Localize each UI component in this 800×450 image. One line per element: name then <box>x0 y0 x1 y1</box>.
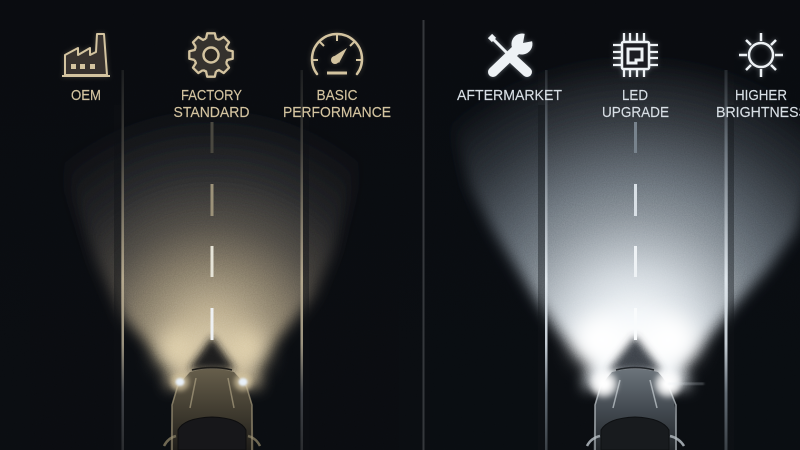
car body <box>170 369 254 450</box>
lane lines <box>122 20 728 450</box>
car body <box>593 369 677 450</box>
centre dashes: left road <box>210 122 214 340</box>
icon: chip <box>613 33 658 77</box>
mirrors <box>587 436 684 446</box>
label: factory standard: FACTORY <box>181 87 242 104</box>
dark notch ahead of car <box>188 336 236 370</box>
warm hotspots near car <box>158 330 266 370</box>
road shoulders dim <box>430 60 800 450</box>
icon: speedometer <box>312 34 362 74</box>
panel: aftermarket LED beam <box>430 60 800 450</box>
label: higher brightness: HIGHER <box>735 87 787 104</box>
car edges <box>595 380 676 450</box>
hood crease <box>616 368 654 370</box>
dark notch ahead of car <box>608 336 662 371</box>
warm light funnel <box>40 60 385 388</box>
label: OEM: OEM <box>71 87 101 104</box>
label: basic performance <box>283 87 391 121</box>
mirrors <box>164 436 260 446</box>
headlights glow <box>591 371 704 397</box>
label: factory standard <box>174 87 250 121</box>
panel: OEM halogen beam <box>30 60 399 450</box>
hood crease <box>192 368 232 370</box>
road shoulder shadows <box>538 105 734 450</box>
label: LED upgrade: LED <box>622 87 648 104</box>
white hotspots near car <box>574 316 696 364</box>
label: basic performance: BASIC <box>316 87 358 104</box>
icon: gear <box>189 33 233 77</box>
icon: sun <box>739 33 783 77</box>
headlights <box>171 373 252 391</box>
icon: wrench and screwdriver <box>490 34 532 72</box>
windshield <box>178 417 246 450</box>
lens flare <box>668 383 704 384</box>
label: higher brightness <box>716 87 800 121</box>
centre dashes: right road <box>634 122 637 340</box>
road shoulder shadows <box>114 105 309 450</box>
white light funnel <box>435 60 800 388</box>
car edges <box>172 378 252 450</box>
icon: factory <box>62 34 110 76</box>
label: basic performance: PERFORMANCE <box>283 104 391 121</box>
road shoulders dim <box>30 60 399 450</box>
label: LED upgrade <box>602 87 669 121</box>
car: halogen <box>164 368 260 450</box>
label: LED upgrade: UPGRADE <box>602 104 669 121</box>
car: LED <box>587 368 704 450</box>
windshield <box>601 417 669 450</box>
label: aftermarket: AFTERMARKET <box>457 87 562 104</box>
label: factory standard: STANDARD <box>174 104 250 121</box>
